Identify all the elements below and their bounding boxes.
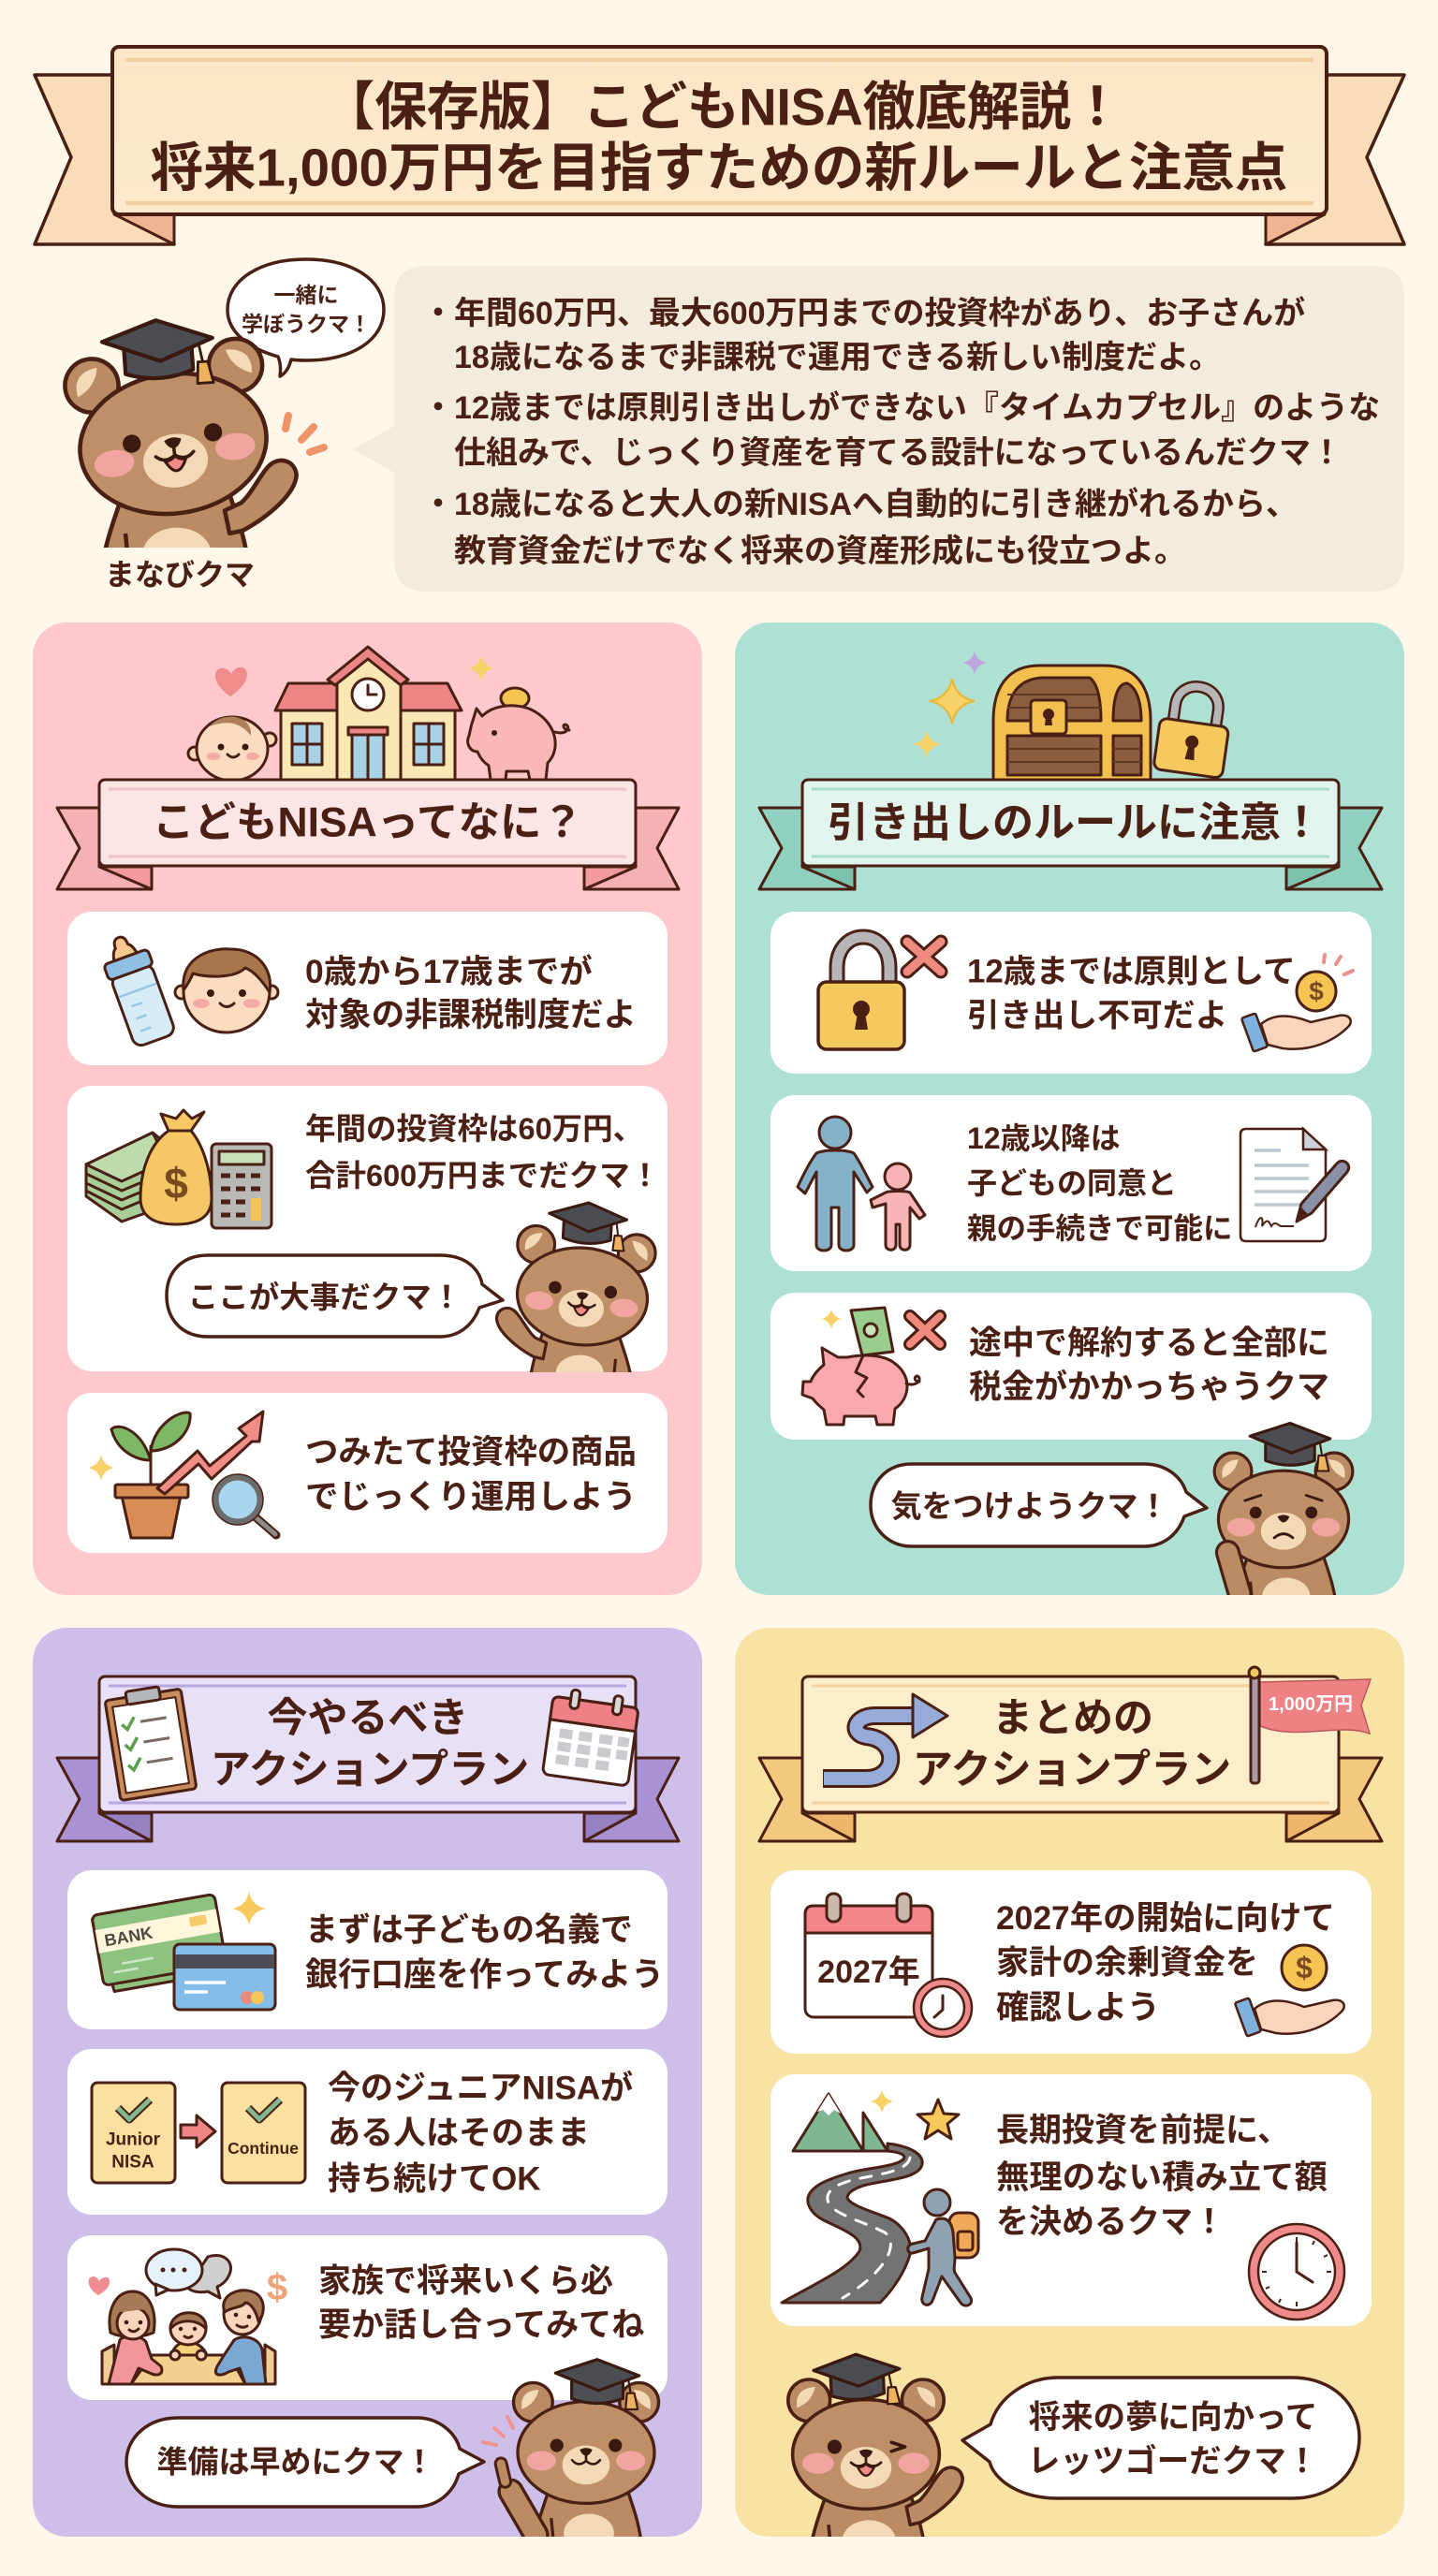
icon: mountains (793, 2094, 888, 2151)
icon: Continue box (222, 2083, 305, 2183)
card text (969, 1325, 1329, 1406)
card: 途中で解約 (770, 1293, 1372, 1440)
card: 長期投資 (770, 2074, 1372, 2326)
icon: winding road (782, 2144, 922, 2303)
intro text: 18歳になるまで非課税で運用できる新しい制度だよ。 (454, 340, 1221, 375)
bubble: レッツゴーだクマ: レッツゴーだクマ！ (1028, 2443, 1318, 2480)
card: 投資枠 (67, 1086, 668, 1392)
icon: lock (818, 937, 904, 1049)
panel: まとめのアクションプラン (735, 1628, 1404, 2562)
card text (305, 953, 637, 1033)
ribbon heading: アクションプラン (913, 1748, 1231, 1793)
icon: clipboard (104, 1683, 197, 1801)
child (170, 2313, 207, 2360)
icon: Junior NISA box (92, 2083, 175, 2183)
icon: treasure chest (993, 666, 1151, 780)
icon: money stack, bag and calculator: $ (164, 1159, 188, 1208)
ribbon heading (57, 780, 679, 889)
icon: winding arrow (823, 1694, 947, 1778)
card text (996, 2112, 1328, 2241)
card text: 子どもの同意と (967, 1166, 1177, 1200)
card text: 確認しよう (996, 1990, 1160, 2026)
card text: 引き出し不可だよ (967, 998, 1227, 1033)
bear character (63, 318, 299, 548)
icon: clock (1249, 2224, 1344, 2320)
ribbon heading (759, 1676, 1382, 1841)
card text: 家計の余剰資金を (996, 1945, 1258, 1981)
icon: hand with coin: $ (1309, 977, 1324, 1005)
banner right tail (1266, 75, 1404, 244)
card text: を決めるクマ！ (996, 2203, 1225, 2241)
table (131, 2355, 245, 2384)
dollar sign: $ (267, 2267, 287, 2308)
card: 12歳以降 (770, 1095, 1372, 1271)
intro text: 18歳になると大人の新NISAへ自動的に引き継がれるから、 (454, 486, 1298, 522)
bear waving (496, 1201, 657, 1392)
icon: sparkle (821, 1309, 842, 1329)
card: 2027年 (770, 1870, 1372, 2054)
icon: calendar 2027 (805, 1894, 932, 2017)
title banner (35, 47, 1404, 244)
card text: 12歳以降は (967, 1121, 1121, 1155)
bear winking (786, 2353, 964, 2537)
card text: 税金がかかっちゃうクマ (969, 1368, 1329, 1406)
icon: Junior NISA box: NISA (111, 2153, 154, 2172)
icon: sparkle (468, 655, 494, 681)
intro text: ・ (422, 390, 454, 426)
card text (305, 1911, 664, 1994)
ribbon heading (759, 780, 1382, 889)
icon: Junior NISA box: Junior (106, 2130, 161, 2149)
icon: broken piggy bank (802, 1308, 919, 1425)
mascot name: まなびクマ (105, 558, 255, 592)
intro text: 仕組みで、じっくり資産を育てる設計になっているんだクマ！ (454, 435, 1343, 471)
banner main (112, 47, 1327, 214)
heart (89, 2276, 110, 2295)
title text: 【保存版】こどもNISA徹底解説！ (322, 77, 1123, 137)
bear thumbs up (501, 2360, 658, 2553)
ribbon heading: 今やるべき (268, 1696, 468, 1741)
rays (483, 2417, 513, 2445)
bear worried (1214, 1423, 1353, 1615)
card text: 今のジュニアNISAが (328, 2071, 633, 2106)
icon: piggy bank (468, 688, 569, 780)
icon: rising arrow (157, 1412, 263, 1494)
card text: 無理のない積み立て額 (996, 2159, 1328, 2196)
speech bubble: 一緒に学ぼうクマ (227, 259, 384, 376)
icon: baby (188, 717, 276, 781)
icon: bank book (92, 1894, 227, 1993)
card text (305, 1112, 660, 1193)
card text: 0歳から17歳までが (305, 953, 593, 990)
icon: parent and child (798, 1117, 925, 1251)
panel: 今やるべきアクションプラン (33, 1628, 702, 2553)
icon: calendar 2027: 2027年 (817, 1954, 920, 1990)
intro text: ・ (422, 487, 454, 522)
icon: alarm clock (914, 1979, 972, 2037)
bubble: レッツゴーだクマ (962, 2378, 1359, 2498)
arrow: Junior to Continue (181, 2115, 215, 2147)
card text: 2027年の開始に向けて (996, 1899, 1335, 1937)
card text: 親の手続きで可能に (967, 1211, 1233, 1245)
icon: money stack, bag and calculator (86, 1110, 271, 1228)
bubble: 準備は早めにクマ: 準備は早めにクマ！ (157, 2445, 434, 2479)
title text (151, 77, 1287, 197)
icon: hand with coin (1241, 955, 1353, 1052)
icon: cross mark (910, 1316, 940, 1344)
card: 12歳まで (770, 912, 1372, 1074)
icon: heart (215, 667, 247, 696)
icon: school (275, 647, 462, 780)
icon: padlock (1153, 682, 1234, 779)
card text: 12歳までは原則として (967, 953, 1296, 990)
card: 家族で話し合う (67, 2235, 668, 2400)
icon: credit card (174, 1944, 275, 2010)
icon: goal flag: 1,000万円 (1269, 1694, 1353, 1715)
ribbon heading: こどもNISAってなに？ (153, 799, 583, 846)
ribbon heading (57, 1676, 679, 1841)
speech bubble: 一緒に学ぼうクマ: 学ぼうクマ！ (242, 312, 371, 336)
card text (967, 1121, 1233, 1245)
icon: family at table (89, 2249, 287, 2384)
mascot: manabi bear (62, 259, 384, 592)
card text: まずは子どもの名義で (305, 1911, 633, 1949)
banner folds (114, 214, 1325, 244)
card text (967, 953, 1296, 1033)
icon: sparkle (232, 1892, 266, 1925)
header illustration: chest, lock, sparkles (913, 651, 1234, 780)
icon: baby bottle (96, 929, 178, 1048)
icon: cross mark (907, 942, 941, 972)
icon: hand with coin: $ (1296, 1951, 1313, 1984)
panel: こどもNISAってなに (33, 622, 702, 1595)
father (215, 2291, 266, 2384)
bubble: 準備は早めにクマ (126, 2418, 484, 2507)
icon: sparkles (913, 651, 987, 758)
card text (305, 1433, 637, 1515)
card text (318, 2263, 644, 2344)
banner left tail (35, 75, 174, 244)
excited rays (286, 416, 324, 452)
card text: つみたて投資枠の商品 (305, 1433, 637, 1471)
card text (996, 1899, 1335, 2026)
card text: 持ち続けてOK (328, 2160, 541, 2198)
bubble: レッツゴーだクマ: 将来の夢に向かって (1029, 2400, 1317, 2436)
intro text: 年間60万円、最大600万円までの投資枠があり、お子さんが (454, 295, 1305, 331)
mother (109, 2291, 162, 2384)
intro panel (353, 266, 1404, 592)
icon: goal flag (1249, 1667, 1371, 1783)
card text: でじっくり運用しよう (305, 1478, 637, 1515)
icon: hiker (908, 2189, 978, 2305)
intro text: ・ (422, 296, 454, 331)
bubble: 気をつけようクマ: 気をつけようクマ！ (891, 1488, 1168, 1524)
icon: sparkle (88, 1455, 114, 1481)
icon: bank book: BANK (103, 1924, 154, 1950)
card text: 年間の投資枠は60万円、 (305, 1112, 643, 1146)
icon: plant in pot (111, 1412, 190, 1538)
panel: 引き出しのルール (735, 622, 1404, 1615)
chairs (102, 2345, 275, 2384)
speech bubbles (146, 2249, 231, 2298)
card text: 途中で解約すると全部に (969, 1325, 1329, 1361)
card: ジュニアNISA (67, 2049, 668, 2215)
speech bubble: 一緒に学ぼうクマ: 一緒に (273, 283, 339, 307)
intro text: 教育資金だけでなく将来の資産形成にも役立つよ。 (454, 534, 1186, 569)
card: つみたて投資枠 (67, 1393, 668, 1553)
icon: child face (175, 949, 278, 1032)
icon: calendar (542, 1687, 640, 1786)
card text: 要か話し合ってみてね (318, 2306, 644, 2344)
header illustration: baby, school, piggy bank (188, 647, 569, 781)
icon: hand with coin (1235, 1945, 1344, 2037)
ribbon heading: アクションプラン (211, 1748, 529, 1793)
card text: 銀行口座を作ってみよう (305, 1956, 664, 1994)
card text: 家族で将来いくら必 (318, 2263, 613, 2299)
card: 0歳から17歳 (67, 912, 668, 1065)
ribbon heading: まとめの (992, 1696, 1153, 1741)
card text: 長期投資を前提に、 (996, 2112, 1290, 2149)
bubble: ここが大事だクマ (167, 1255, 503, 1337)
title text: 将来1,000万円を目指すための新ルールと注意点 (151, 139, 1287, 197)
bubble: ここが大事だクマ: ここが大事だクマ！ (188, 1280, 462, 1314)
icon: document and pen (1240, 1129, 1349, 1241)
card text: ある人はそのまま (328, 2115, 590, 2151)
card text: 合計600万円までだクマ！ (305, 1159, 660, 1193)
intro text (422, 295, 1380, 569)
icon: star (917, 2100, 959, 2139)
card: 銀行口座 (67, 1870, 668, 2029)
card text (328, 2071, 633, 2198)
icon: magnifier (213, 1474, 276, 1535)
card text: 対象の非課税制度だよ (305, 996, 637, 1033)
icon: sparkle (871, 2089, 893, 2114)
ribbon heading: 引き出しのルールに注意！ (828, 799, 1322, 846)
bubble: 気をつけようクマ (871, 1464, 1207, 1546)
icon: Continue box: Continue (227, 2139, 299, 2158)
intro text: 12歳までは原則引き出しができない『タイムカプセル』のような (454, 389, 1380, 426)
